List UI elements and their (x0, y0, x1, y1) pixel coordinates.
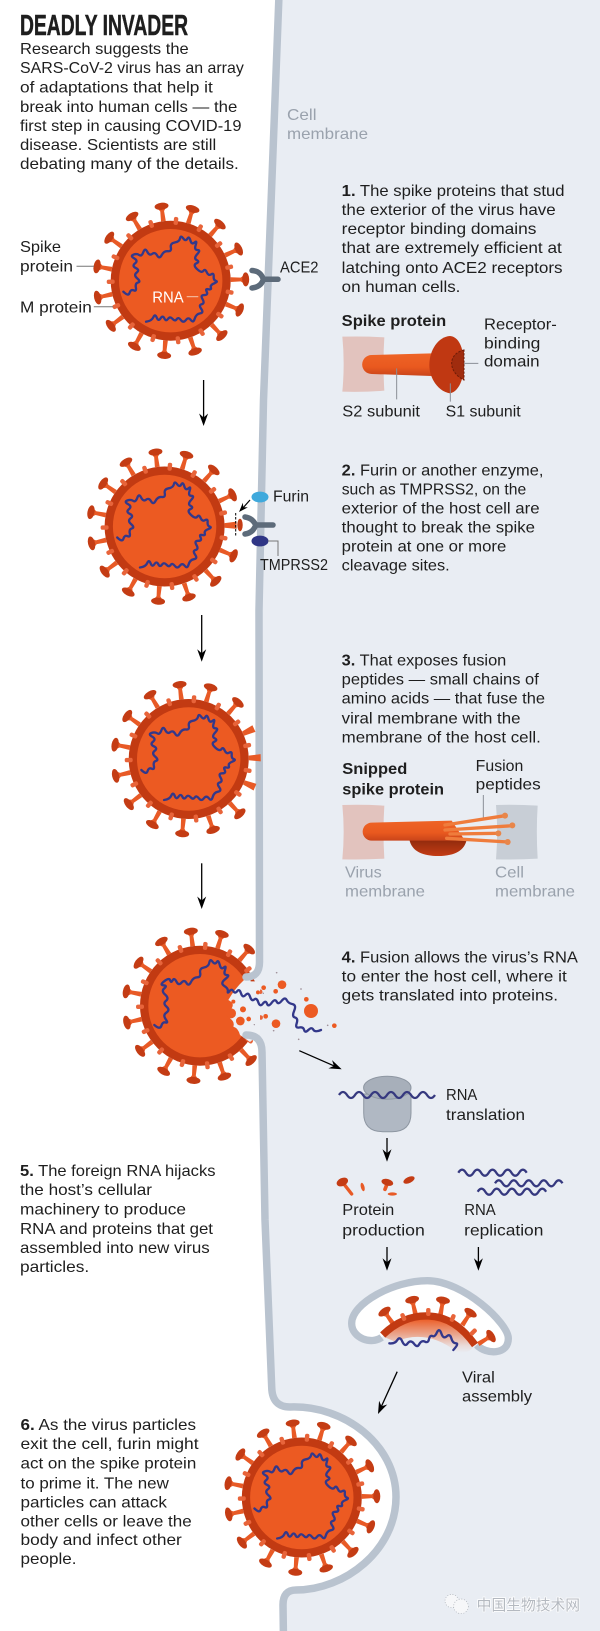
snipped spike protein diagram: spike protein (342, 781, 444, 798)
cell membrane label: membrane (287, 126, 368, 143)
step 4 text (342, 949, 578, 1004)
product labels (342, 1202, 543, 1240)
title: DEADLY INVADER (20, 10, 188, 42)
step 4 text: 4. Fusion allows the virus’s RNA (342, 949, 578, 966)
step 6 text: body and infect other (20, 1532, 182, 1549)
step 6 text: particles can attack (20, 1494, 167, 1511)
furin, TMPRSS2 and cleavage: Furin (273, 489, 309, 506)
spike protein diagram: binding (484, 335, 540, 352)
spike protein diagram: S1 subunit (446, 404, 521, 421)
watermark (445, 1594, 580, 1614)
step 5 text: assembled into new virus (20, 1240, 210, 1257)
snipped spike protein diagram: Snipped (342, 761, 407, 778)
step 1 text (342, 183, 564, 296)
snipped spike protein diagram: membrane (495, 884, 575, 901)
product labels: production (342, 1223, 425, 1240)
virus 1 labels (20, 239, 198, 316)
arrow: virus 1 to 2 (199, 380, 208, 426)
viral assembly vesicle (352, 1281, 508, 1353)
furin, TMPRSS2 and cleavage: TMPRSS2 (260, 557, 328, 574)
step 6 text: to prime it. The new (20, 1475, 169, 1492)
snipped spike protein diagram: peptides (476, 776, 541, 793)
ribosome: RNA translation (339, 1076, 525, 1132)
step 2 text: such as TMPRSS2, on the (342, 481, 526, 498)
virus 4: fusing with membrane (122, 927, 263, 1085)
intro text: disease. Scientists are still (20, 137, 216, 154)
step 6 text: exit the cell, furin might (20, 1436, 199, 1453)
step 3 text (342, 652, 545, 746)
virus 2 (86, 448, 240, 605)
step 2 text: exterior of the host cell are (342, 500, 540, 517)
spike protein diagram: Spike protein (342, 313, 446, 330)
step 1 text: latching onto ACE2 receptors (342, 260, 563, 277)
intro text (20, 41, 244, 173)
virus 1 labels: RNA (152, 290, 184, 307)
step 5 text (20, 1163, 216, 1276)
step 4 text: gets translated into proteins. (342, 987, 558, 1004)
step 6 text: people. (20, 1551, 76, 1568)
step 1 text: 1. The spike proteins that stud (342, 183, 564, 200)
arrow: virus 3 to 4 (197, 863, 206, 909)
step 2 text: 2. Furin or another enzyme, (342, 462, 543, 479)
intro text: first step in causing COVID-19 (20, 118, 242, 135)
step 2 text: protein at one or more (342, 538, 507, 555)
watermark: 中国生物技术网 (477, 1597, 580, 1614)
step 3 text: membrane of the host cell. (342, 729, 541, 746)
ribosome: RNA translation: translation (446, 1107, 525, 1124)
step 1 text: receptor binding domains (342, 221, 537, 238)
spike protein diagram (342, 313, 557, 421)
step 1 text: the exterior of the virus have (342, 202, 556, 219)
RNA replication strands (458, 1170, 562, 1195)
product labels: RNA (464, 1202, 496, 1219)
step 3 text: 3. That exposes fusion (342, 652, 506, 669)
arrow: RNA to ribosome (299, 1051, 344, 1073)
step 6 text: other cells or leave the (20, 1513, 192, 1530)
virus 3 (110, 680, 261, 838)
virus 1 labels: Spike (20, 239, 61, 256)
step 2 text (342, 462, 543, 575)
step 5 text: 5. The foreign RNA hijacks (20, 1163, 216, 1180)
viral assembly label (462, 1369, 532, 1406)
virus 1 labels: protein (20, 259, 73, 276)
step 2 text: thought to break the spike (342, 519, 535, 536)
step 5 text: particles. (20, 1259, 89, 1276)
spike protein diagram: domain (484, 354, 540, 371)
ACE2 receptor: ACE2 (280, 259, 318, 276)
cell membrane label: Cell (287, 107, 316, 124)
step 3 text: viral membrane with the (342, 710, 521, 727)
intro text: SARS-CoV-2 virus has an array (20, 60, 244, 77)
product labels: Protein (342, 1202, 394, 1219)
ribosome: RNA translation: RNA (446, 1087, 478, 1104)
protein fragments (335, 1175, 416, 1196)
cell membrane label (287, 107, 368, 143)
virus 1 labels: M protein (20, 299, 92, 316)
viral assembly label: Viral (462, 1369, 495, 1386)
arrow: assembly to exit (374, 1372, 397, 1416)
step 1 text: on human cells. (342, 279, 460, 296)
spike protein diagram: Receptor- (484, 316, 557, 333)
virus 6: exiting the cell (223, 1419, 380, 1576)
intro text: Research suggests the (20, 41, 189, 58)
fusion splatter and released RNA (154, 960, 337, 1040)
step 6 text: 6. As the virus particles (20, 1417, 196, 1434)
step 3 text: peptides — small chains of (342, 671, 539, 688)
intro text: of adaptations that help it (20, 80, 213, 97)
snipped spike protein diagram (342, 758, 575, 901)
virus 1 (92, 202, 249, 360)
arrows to assembly (382, 1247, 483, 1271)
cell membrane band (246, 0, 396, 1631)
intro text: break into human cells — the (20, 99, 238, 116)
furin, TMPRSS2 and cleavage (236, 489, 328, 574)
step 3 text: amino acids — that fuse the (342, 690, 545, 707)
step 6 text: act on the spike protein (20, 1455, 196, 1472)
exterior white background (0, 0, 396, 1631)
step 1 text: that are extremely efficient at (342, 240, 562, 257)
product labels: replication (464, 1223, 543, 1240)
step 5 text: machinery to produce (20, 1201, 186, 1218)
step 6 text (20, 1417, 199, 1568)
viral assembly label: assembly (462, 1389, 532, 1406)
spike protein diagram: S2 subunit (342, 404, 421, 421)
snipped spike protein diagram: Cell (495, 865, 524, 882)
snipped spike protein diagram: Virus (345, 865, 382, 882)
intro text: debating many of the details. (20, 156, 239, 173)
step 5 text: the host’s cellular (20, 1182, 152, 1199)
snipped spike protein diagram: Fusion (476, 758, 523, 775)
arrow: virus 2 to 3 (197, 615, 206, 662)
step 5 text: RNA and proteins that get (20, 1221, 214, 1238)
ACE2 receptor (252, 259, 318, 288)
snipped spike protein diagram: membrane (345, 884, 425, 901)
step 2 text: cleavage sites. (342, 558, 450, 575)
arrow: translation to products (382, 1138, 392, 1162)
step 4 text: to enter the host cell, where it (342, 968, 567, 985)
